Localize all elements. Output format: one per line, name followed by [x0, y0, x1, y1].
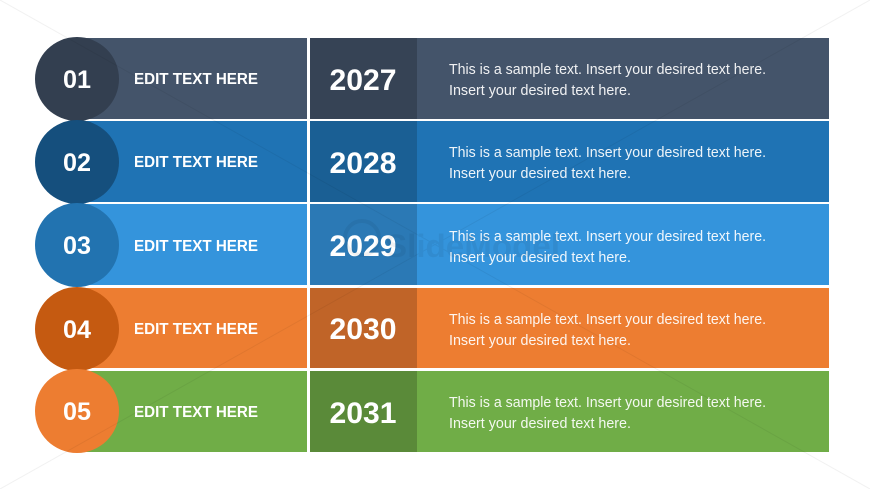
heading 3: EDIT TEXT HERE	[134, 238, 258, 255]
year band 4	[310, 288, 417, 368]
description 5: Insert your desired text here.	[449, 416, 631, 432]
row 1	[35, 37, 829, 121]
description 3	[449, 229, 766, 266]
description 3: Insert your desired text here.	[449, 250, 631, 266]
description 4	[449, 312, 766, 349]
description band 4	[417, 288, 829, 368]
row 5	[35, 369, 829, 453]
description 1	[449, 62, 766, 99]
number 03: 03	[63, 232, 91, 260]
left label band 1	[77, 38, 307, 119]
heading 2: EDIT TEXT HERE	[134, 154, 258, 171]
heading 4: EDIT TEXT HERE	[134, 321, 258, 338]
number circle 02	[35, 120, 119, 204]
number 04: 04	[63, 316, 91, 344]
number 01: 01	[63, 66, 91, 94]
heading 1: EDIT TEXT HERE	[134, 71, 258, 88]
heading 5: EDIT TEXT HERE	[134, 404, 258, 421]
description band 2	[417, 121, 829, 202]
year 2029: 2029	[330, 230, 396, 263]
description band 1	[417, 38, 829, 119]
number circle 01	[35, 37, 119, 121]
description band 5	[417, 371, 829, 452]
description 2: Insert your desired text here.	[449, 166, 631, 182]
row 4	[35, 287, 829, 371]
number 05: 05	[63, 398, 91, 426]
description 5: This is a sample text. Insert your desired text here.	[449, 395, 766, 411]
year band 3	[310, 204, 417, 285]
description 1: This is a sample text. Insert your desired text here.	[449, 62, 766, 78]
year 2030: 2030	[330, 313, 396, 346]
left label band 2	[77, 121, 307, 202]
left label band 3	[77, 204, 307, 285]
description band 3	[417, 204, 829, 285]
row 2	[35, 120, 829, 204]
watermark: SlideModel	[385, 228, 560, 264]
description 2	[449, 145, 766, 182]
description 3: This is a sample text. Insert your desired text here.	[449, 229, 766, 245]
description 2: This is a sample text. Insert your desired text here.	[449, 145, 766, 161]
number 02: 02	[63, 149, 91, 177]
year band 5	[310, 371, 417, 452]
number circle 04	[35, 287, 119, 371]
year band 2	[310, 121, 417, 202]
left label band 5	[77, 371, 307, 452]
description 5	[449, 395, 766, 432]
number circle 03	[35, 203, 119, 287]
year 2028: 2028	[330, 147, 396, 180]
year band 1	[310, 38, 417, 119]
year 2027: 2027	[330, 64, 396, 97]
year 2031: 2031	[330, 397, 396, 430]
row 3	[35, 203, 829, 287]
description 4: Insert your desired text here.	[449, 333, 631, 349]
description 1: Insert your desired text here.	[449, 83, 631, 99]
number circle 05	[35, 369, 119, 453]
left label band 4	[77, 288, 307, 368]
description 4: This is a sample text. Insert your desired text here.	[449, 312, 766, 328]
